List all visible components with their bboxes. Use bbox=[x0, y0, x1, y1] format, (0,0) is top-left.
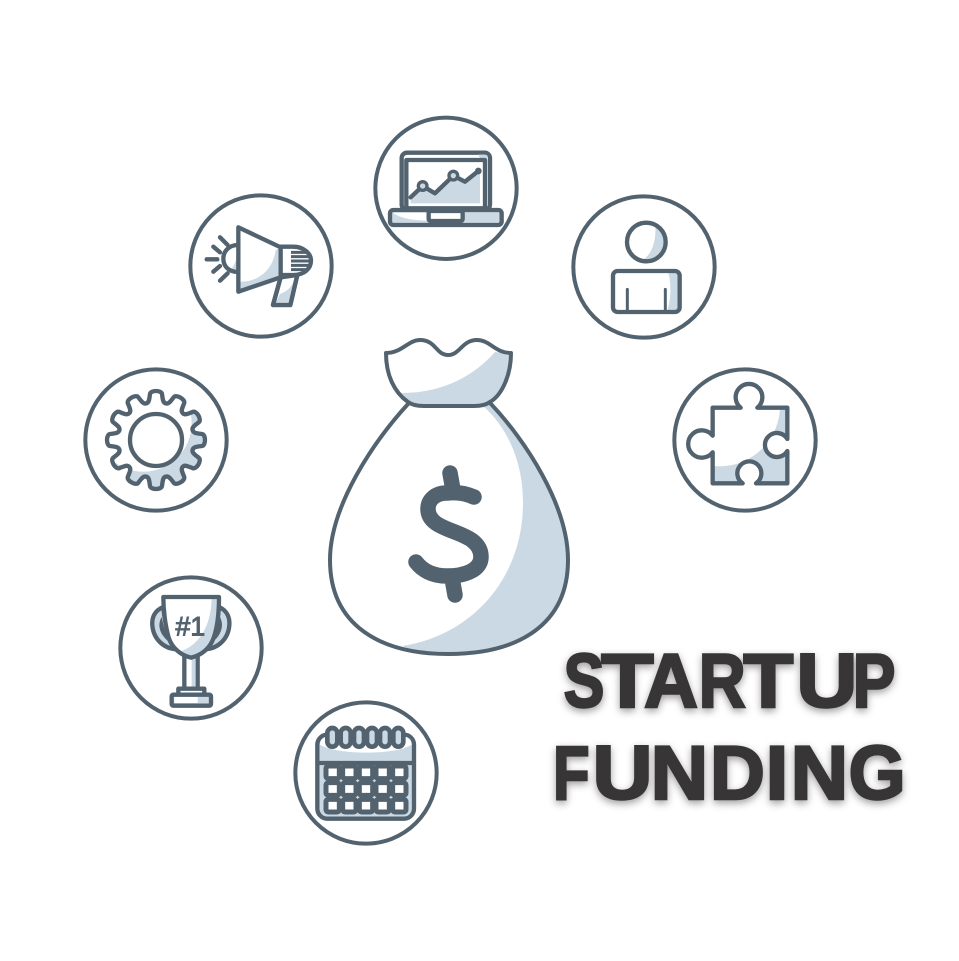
icon: gear bbox=[85, 369, 227, 511]
icon: laptop with chart bbox=[375, 118, 517, 259]
calendar body bbox=[317, 735, 414, 819]
icon: megaphone bbox=[190, 195, 332, 337]
screen corner shade bbox=[478, 155, 488, 158]
person arms bbox=[627, 289, 665, 311]
chart area bbox=[411, 173, 480, 203]
puzzle ring bbox=[674, 369, 816, 511]
gear ring bbox=[85, 369, 227, 511]
calendar header highlight bbox=[320, 737, 412, 753]
puzzle shade bbox=[714, 410, 786, 482]
title line: STARTUP: A bbox=[644, 639, 698, 724]
title line: FUNDING: N bbox=[651, 731, 708, 816]
title line: STARTUP: T bbox=[601, 639, 654, 724]
calendar ring bbox=[295, 702, 437, 844]
laptop ring bbox=[375, 118, 517, 259]
mouth stripes bbox=[291, 252, 310, 270]
chart line bbox=[411, 171, 478, 197]
gear hole bbox=[130, 414, 182, 466]
bag neck shading bbox=[402, 352, 511, 406]
bag body outline bbox=[330, 404, 568, 654]
trophy base bbox=[172, 695, 211, 706]
handle bbox=[273, 275, 297, 305]
title line: STARTUP: U bbox=[796, 639, 857, 724]
person ring bbox=[573, 196, 715, 338]
trophy label: #1 bbox=[176, 611, 205, 641]
puzzle outline bbox=[688, 384, 787, 483]
title line: FUNDING: F bbox=[553, 731, 590, 816]
title line: FUNDING: I bbox=[766, 731, 788, 816]
icon: calendar bbox=[295, 702, 437, 844]
bag body shading bbox=[402, 404, 568, 654]
back dome bbox=[223, 245, 238, 272]
sound rays bbox=[207, 237, 228, 281]
gear shade bbox=[115, 414, 203, 487]
title line: FUNDING: N bbox=[791, 731, 848, 816]
chart points bbox=[418, 182, 427, 190]
megaphone ring bbox=[190, 195, 332, 337]
dollar sign bbox=[416, 473, 481, 595]
trophy ring bbox=[120, 577, 262, 719]
icon: puzzle piece bbox=[672, 367, 818, 513]
title line: FUNDING: U bbox=[592, 731, 652, 816]
title line: FUNDING: D bbox=[710, 731, 765, 816]
laptop screen bbox=[402, 153, 490, 210]
cone bbox=[238, 227, 281, 292]
cone shade bbox=[238, 247, 281, 292]
bag neck bbox=[386, 340, 511, 406]
title line: STARTUP: P bbox=[853, 639, 896, 724]
title bbox=[553, 639, 906, 816]
icon: person bbox=[573, 196, 715, 338]
icon: money bag with dollar sign bbox=[330, 340, 568, 654]
date cells bbox=[326, 766, 406, 812]
inner screen bbox=[406, 160, 485, 208]
mouth bbox=[281, 247, 311, 275]
header divider bbox=[319, 756, 413, 769]
laptop base bbox=[390, 210, 502, 225]
icon: trophy bbox=[120, 577, 262, 719]
title line: FUNDING: G bbox=[849, 731, 906, 816]
bag neck outline bbox=[386, 340, 511, 406]
person head bbox=[644, 228, 664, 260]
person body bbox=[613, 271, 680, 312]
bag body bbox=[330, 404, 568, 654]
handle inner shade bbox=[159, 617, 222, 643]
trophy cup bbox=[166, 599, 217, 656]
title line: STARTUP: S bbox=[564, 639, 604, 724]
trophy step bbox=[178, 689, 204, 695]
base highlight bbox=[393, 213, 428, 221]
base notch bbox=[429, 211, 463, 221]
title line: STARTUP: R bbox=[699, 639, 746, 724]
trophy stem bbox=[184, 656, 198, 689]
trophy handles bbox=[152, 607, 177, 649]
gear outline bbox=[107, 391, 205, 489]
title line: STARTUP: T bbox=[743, 639, 793, 724]
binding rings bbox=[327, 728, 403, 747]
